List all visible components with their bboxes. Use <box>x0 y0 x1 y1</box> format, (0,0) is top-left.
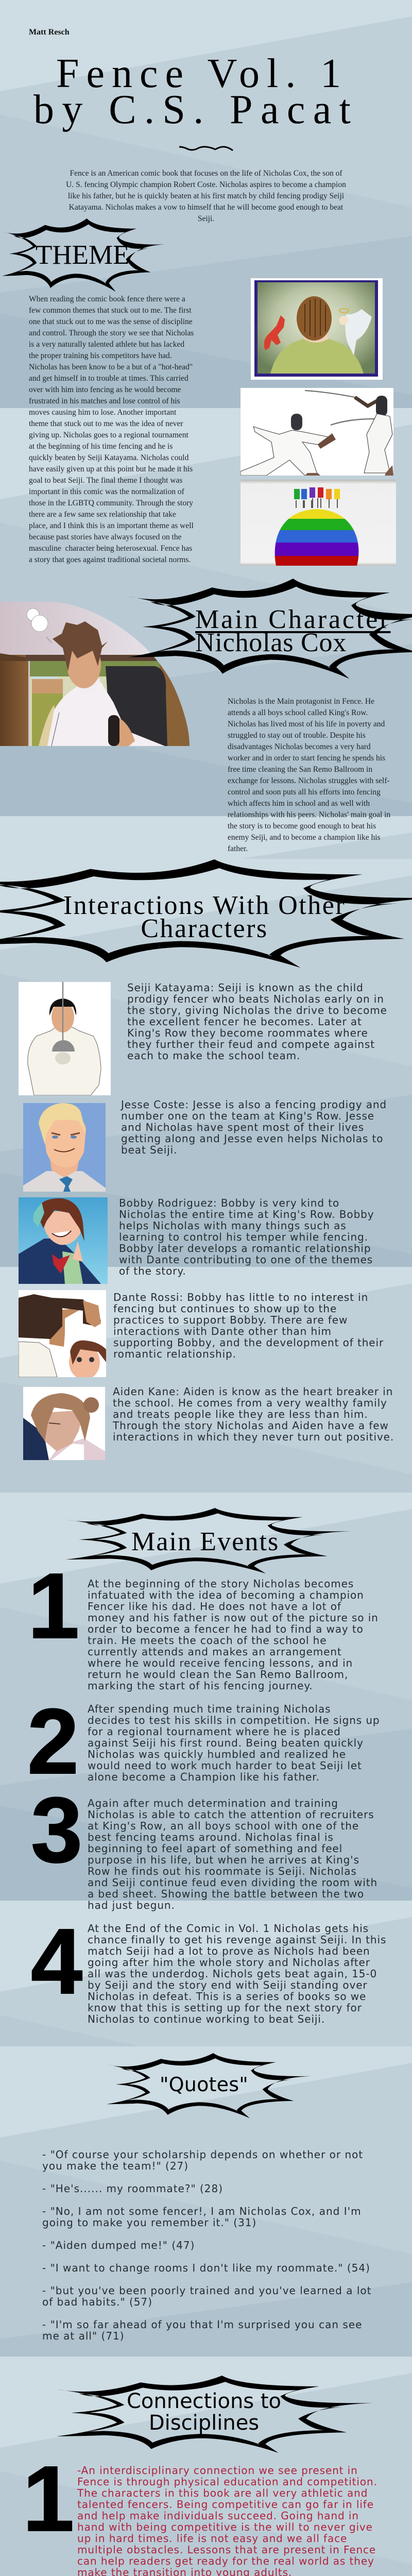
event 1 text: Fencer like his dad. He does not have a lot of <box>88 1600 341 1613</box>
event 4 text: going after him the whole story and Nicholas after <box>88 1956 370 1969</box>
heading: interactions <box>63 891 346 943</box>
byline: Matt Resch <box>29 28 70 37</box>
text: Bobby: helps Nicholas with many things such as <box>119 1219 347 1232</box>
event 4 text: chance finally to get his revenge against Seiji. In this <box>88 1934 386 1946</box>
image: rainbow dome with people <box>241 480 396 566</box>
theme text: Nicholas has been know to be a but of a "hot-head" <box>29 363 193 371</box>
main character text: which affects him in school and as well with <box>228 799 370 808</box>
text: Jesse: Jesse Coste: Jesse is also a fencing prodigy and <box>121 1098 387 1111</box>
panel: main character <box>0 579 412 853</box>
event 1 text: infatuated with the idea of becoming a champion <box>88 1589 364 1601</box>
heading: interactions: Characters <box>141 914 268 943</box>
burst: main events <box>66 1508 351 1573</box>
event 3 text: had just begun. <box>88 1899 175 1911</box>
event 1 text: marking the start of his fencing journey. <box>88 1680 313 1692</box>
theme text: place, and I think this is an important theme as well <box>29 521 194 530</box>
event 1 text: order to become a fencer he had to find a way to <box>88 1623 364 1635</box>
theme text: one that stuck out to me was the sense of discipline <box>29 317 193 326</box>
theme text: a story that goes against traditional societal norms. <box>29 555 191 564</box>
theme text: over with him into fencing as he would become <box>29 385 181 394</box>
text: Dante: fencing but continues to show up to the <box>113 1302 337 1315</box>
event 2 text: for a regional tournament where he is placed <box>88 1725 341 1738</box>
event 3 text: best fencing teams around. Nicholas final is <box>88 1831 334 1843</box>
portrait: Seiji <box>19 982 111 1095</box>
theme text: When reading the comic book fence there were a <box>29 295 185 303</box>
text: Dante: supporting Bobby, and the development of their <box>113 1336 384 1349</box>
main character text: the story is to become good enough to beat his <box>228 822 376 831</box>
event 2 text <box>88 1703 380 1783</box>
theme text: because past stories have always focused on the <box>29 533 182 541</box>
connection 1 text: hand with being competitive is the will to never give <box>77 2521 373 2533</box>
text: Jesse: and Nicholas have spent most of their lives <box>121 1121 364 1133</box>
event 2 text: decides to test his skills in competition. He signs up <box>88 1714 380 1726</box>
text: Seiji: prodigy fencer who beats Nicholas early on in <box>127 993 384 1005</box>
image: angel and devil <box>251 278 383 380</box>
quotes list: of bad habits." (57) <box>42 2296 152 2308</box>
event 3 text: beginning to feel apart of something and feel <box>88 1842 342 1855</box>
main character text: disadvantages Nicholas becomes a very hard <box>228 742 371 751</box>
heading: main events: Main Events <box>131 1527 279 1556</box>
main character text: worker and in order to start fencing he spends his <box>228 754 385 762</box>
event 3 text: a bed sheet. Showing the battle between the two <box>88 1888 364 1900</box>
text: Aiden: interactions in which they never turn out positive. <box>113 1431 394 1443</box>
portrait: Aiden <box>23 1387 105 1460</box>
text: Seiji: the story, giving Nicholas the drive to become <box>127 1004 387 1016</box>
theme text: frustrated in his matches and lose control of his <box>29 397 180 405</box>
connection 1 text <box>77 2464 377 2576</box>
main character text: free time cleaning the San Remo Ballroom in <box>228 765 372 774</box>
event 3 text: Nicholas is able to catch the attention of recruiters <box>88 1808 374 1821</box>
panel: header <box>29 28 358 223</box>
main character text: enemy Seiji, and to become a champion like his <box>228 833 381 842</box>
event 4 text <box>88 1922 386 2025</box>
text: Aiden: Through the story Nicholas and Aiden have a few <box>113 1419 389 1432</box>
burst: main character <box>129 579 412 679</box>
heading: interactions: Interactions With Other <box>63 891 346 920</box>
heading: theme: THEME <box>36 240 130 270</box>
connection 1 text: can help readers get ready for the real world as they <box>77 2555 374 2567</box>
quotes list: me at all" (71) <box>42 2330 125 2342</box>
portrait: Jesse <box>23 1103 106 1192</box>
theme text: and control. Through the story we see that Nicholas <box>29 329 194 337</box>
theme text: have easily given up at this point but he made it his <box>29 465 193 473</box>
theme text: few common themes that stuck out to me. The first <box>29 306 192 315</box>
number 2: 2 <box>27 1690 79 1793</box>
event 1 text: At the beginning of the story Nicholas becomes <box>88 1578 354 1590</box>
connection 1 text: talented fencers. Being competitive can go far in life <box>77 2498 374 2511</box>
image: Nicholas <box>0 602 190 746</box>
theme text: there are a few same sex relationship that take <box>29 510 176 519</box>
quotes list: - "but you've been poorly trained and you've learned a lot <box>42 2284 371 2297</box>
text: Jesse: number one on the team at King's Row. Jesse <box>121 1110 374 1122</box>
event 3 text: and Seiji continue feud even dividing the room with <box>88 1876 377 1889</box>
event 2 text: would need to work much harder to beat Seiji let <box>88 1759 362 1772</box>
quotes list: - "Of course your scholarship depends on whether or not <box>42 2148 363 2161</box>
main character text: control and soon puts all his efforts into fencing <box>228 788 381 796</box>
number 1: 1 <box>28 1554 79 1658</box>
text: Seiji: they further their feud and compete against <box>127 1038 375 1050</box>
connection 1 text: multiple obstacles. Lessons that are present in Fence <box>77 2544 376 2556</box>
panel: quotes <box>42 2053 371 2342</box>
text: Aiden: Aiden Kane: Aiden is know as the heart breaker in <box>113 1385 393 1398</box>
text: Jesse: beat Seiji. <box>121 1144 177 1156</box>
heading: connections <box>127 2389 281 2435</box>
text: Aiden: the school. He comes from a very wealthy family <box>113 1397 387 1409</box>
portrait: Dante <box>19 1290 106 1377</box>
text: Bobby: learning to control his temper while fencing. <box>119 1231 368 1243</box>
main character text: Nicholas has lived most of his life in poverty and <box>228 720 385 728</box>
text: Aiden <box>112 1385 394 1443</box>
quotes list: - "He's...... my roommate?" (28) <box>42 2182 223 2195</box>
portrait: Bobby <box>19 1197 108 1284</box>
theme text: important in this comic was the normalization of <box>29 487 184 496</box>
theme text: the proper training his competitors have had. <box>29 351 172 360</box>
burst: interactions <box>0 859 412 968</box>
image: fencers <box>241 388 393 476</box>
burst: theme <box>2 218 164 292</box>
title: by C.S. Pacat <box>33 87 358 132</box>
main character text: Nicholas is the Main protagonist in Fence. He <box>228 697 374 706</box>
quotes list: - "I want to change rooms I don't like my roommate." (54) <box>42 2262 370 2274</box>
quotes list: going to make you remember it." (31) <box>42 2216 256 2229</box>
text: Dante: Dante Rossi: Bobby has little to no interest in <box>113 1291 368 1303</box>
event 3 text <box>88 1797 377 1911</box>
heading: main character <box>195 605 390 657</box>
quotes list: - "Aiden dumped me!" (47) <box>42 2239 195 2251</box>
event 3 text: purpose in his life, but when he arrives at King's <box>88 1854 359 1866</box>
quotes list: - "I'm so far ahead of you that I'm surprised you can see <box>42 2318 362 2331</box>
event 4 text: all was the underdog. Nichols gets beat again, 15-0 <box>88 1968 377 1980</box>
heading: quotes: "Quotes" <box>160 2073 248 2096</box>
event 3 text: at King's Row, an all boys school with one of the <box>88 1820 359 1832</box>
title: Fence Vol. 1 <box>56 51 348 96</box>
text: Bobby: of the story. <box>119 1265 186 1277</box>
quotes list <box>42 2148 371 2342</box>
theme text <box>29 295 194 564</box>
text: Dante <box>113 1291 384 1360</box>
main character text: attends a all boys school called King's Row. <box>228 708 368 717</box>
main character text: father. <box>228 844 248 853</box>
text: Seiji <box>127 981 387 1062</box>
number 4: 4 <box>31 1910 82 2013</box>
burst: quotes <box>107 2053 311 2119</box>
heading: connections: Disciplines <box>149 2411 259 2435</box>
panel: connections to disciplines <box>23 2376 377 2576</box>
theme text: is a very naturally talented athlete but has lacked <box>29 340 184 349</box>
connection 1 text: up in hard times. life is not easy and we all face <box>77 2532 347 2545</box>
theme text: masculine character being heterosexual. Fence has <box>29 544 192 553</box>
panel: main events <box>27 1508 386 2025</box>
theme text: quickly beaten by Seiji Katayama. Nicholas could <box>29 453 188 462</box>
text: Dante: practices to support Bobby. There are few <box>113 1314 348 1326</box>
event 3 text: Row he finds out his roommate is Seiji. Nicholas <box>88 1865 357 1877</box>
event 4 text: match Seiji had a lot to prove as Nichols had been <box>88 1945 370 1957</box>
event 2 text: against Seiji his first round. Being beaten quickly <box>88 1737 364 1749</box>
connection 1 text: -An interdisciplinary connection we see present in <box>77 2464 358 2477</box>
main character text: struggled to stay out of trouble. Despite his <box>228 731 366 740</box>
intro text: Seiji. <box>198 214 214 223</box>
connection 1 text: Fence is through physical education and competition. <box>77 2476 377 2488</box>
theme text: moves causing him to lose. Another important <box>29 408 176 417</box>
theme text: and get himself in to trouble at times. This carried <box>29 374 188 383</box>
text: Jesse <box>121 1098 387 1156</box>
event 4 text: know that this is setting up for the next story for <box>88 2002 362 2014</box>
event 2 text: Nicholas was quickly humbled and realized he <box>88 1748 346 1760</box>
main character text <box>228 697 390 853</box>
text: Aiden: and treats people like they are less than him. <box>113 1408 368 1420</box>
event 1 text: where he would receive fencing lessons, and in <box>88 1657 353 1669</box>
event 1 text <box>88 1578 379 1692</box>
event 1 text: currently attends and makes an arrangement <box>88 1646 342 1658</box>
heading: main character: Main Character <box>195 605 390 634</box>
number 1: 1 <box>23 2447 74 2551</box>
panel: theme <box>2 218 396 566</box>
event 4 text: Nicholas to continue working to beat Seiji. <box>88 2013 325 2025</box>
event 2 text: alone become a Champion like his father. <box>88 1771 320 1783</box>
text: Bobby <box>119 1197 374 1277</box>
theme text: goal to beat Seiji. The final theme I thought was <box>29 476 182 485</box>
connection 1 text: and help make individuals succeed. Going hand in <box>77 2510 359 2522</box>
event 4 text: Nicholas in defeat. This is a series of books so we <box>88 1990 366 2003</box>
title <box>33 51 358 132</box>
quotes list: - "No, I am not some fencer!, I am Nicholas Cox, and I'm <box>42 2205 362 2217</box>
theme text: giving up. Nicholas goes to a regional tournament <box>29 431 188 439</box>
text: Seiji: Seiji Katayama: Seiji is known as the child <box>127 981 364 994</box>
event 4 text: At the End of the Comic in Vol. 1 Nicholas gets his <box>88 1922 369 1935</box>
burst: connections <box>57 2376 373 2453</box>
event 1 text: train. He meets the coach of the school he <box>88 1634 327 1647</box>
intro text <box>66 169 346 223</box>
text: Dante: romantic relationship. <box>113 1348 236 1360</box>
event 4 text: by Seiji and the story end with Seiji standing over <box>88 1979 368 1991</box>
theme text: at the beginning of his time fencing and he is <box>29 442 173 451</box>
event 1 text: money and his father is now out of the picture so in <box>88 1612 379 1624</box>
text: Seiji: the excellent fencer he becomes. Later at <box>127 1015 362 1028</box>
text: Seiji: King's Row they become roommates where <box>127 1027 368 1039</box>
event 3 text: Again after much determination and training <box>88 1797 338 1809</box>
icon: wave divider <box>179 146 233 151</box>
text: Bobby: Nicholas the entire time at King's Row. Bobby <box>119 1208 374 1221</box>
intro text: Katayama. Nicholas makes a vow to himself that he will become good enough to beat <box>69 203 343 212</box>
text: Bobby: with Dante contributing to one of the themes <box>119 1253 373 1266</box>
intro text: like his father, but he is quickly beaten at his first match by child fencing prodigy Seiji <box>68 192 344 200</box>
intro text: Fence is an American comic book that focuses on the life of Nicholas Cox, the son of <box>70 169 342 178</box>
main character text: relationships with his peers. Nicholas' main goal in <box>228 810 390 819</box>
text: Seiji: each to make the school team. <box>127 1049 300 1062</box>
event 1 text: return he would clean the San Remo Ballroom, <box>88 1668 348 1681</box>
theme text: those in the LGBTQ community. Through the story <box>29 499 193 507</box>
panel: interactions with other characters <box>0 859 412 1460</box>
text: Bobby: Bobby later develops a romantic relationship <box>119 1242 371 1255</box>
text: Jesse: getting along and Jesse even helps Nicholas to <box>121 1132 383 1145</box>
text: Bobby: Bobby Rodriguez: Bobby is very kind to <box>119 1197 339 1209</box>
number 3: 3 <box>31 1778 82 1882</box>
main character text: exchange for lessons. Nicholas struggles with self- <box>228 776 390 785</box>
quotes list: you make the team!" (27) <box>42 2160 188 2172</box>
heading: main character: Nicholas Cox <box>195 628 347 657</box>
connection 1 text: The characters in this book are all very athletic and <box>77 2487 368 2499</box>
heading: connections: Connections to <box>127 2389 281 2413</box>
event 2 text: After spending much time training Nicholas <box>88 1703 331 1715</box>
theme text: theme that stuck out to me was the idea of never <box>29 419 183 428</box>
intro text: U. S. fencing Olympic champion Robert Coste. Nicholas aspires to become a champion <box>66 180 346 189</box>
text: Dante: interactions with Dante other than him <box>113 1325 332 1337</box>
